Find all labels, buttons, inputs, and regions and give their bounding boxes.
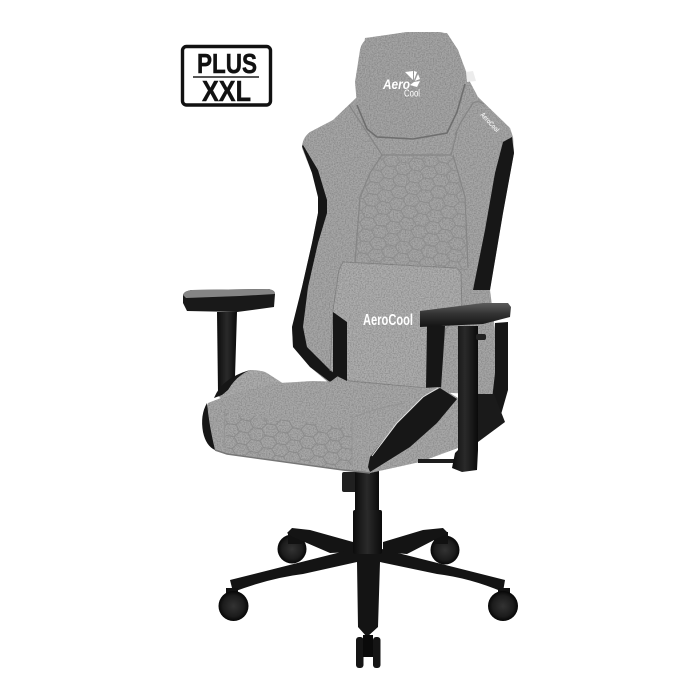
lower link bar (418, 459, 456, 463)
chair base and casters (218, 470, 518, 668)
seat cushion (202, 370, 458, 473)
headrest AeroCool logo (382, 71, 420, 100)
logo fan (405, 71, 420, 87)
armrest post (452, 326, 478, 472)
rear bracket (492, 322, 508, 418)
seat upholstery (204, 381, 458, 473)
headrest (355, 32, 465, 139)
armrest pad (183, 289, 275, 312)
lumbar pillow (330, 262, 462, 389)
right armrest assembly (418, 303, 511, 472)
badge: PLUS XXL: XXL (202, 76, 251, 108)
adjuster knob (476, 334, 486, 340)
chair backrest (292, 32, 514, 395)
headrest AeroCool logo: Aero (382, 77, 410, 92)
right black side panel (473, 137, 514, 290)
headrest AeroCool logo: Cool (404, 88, 420, 100)
seat honeycomb panel (225, 413, 352, 468)
seat left black edge (202, 403, 215, 450)
left armrest (183, 289, 275, 392)
badge: PLUS XXL (182, 46, 270, 108)
badge: PLUS XXL: PLUS (197, 48, 257, 79)
rear left caster (278, 532, 306, 564)
armrest pad (420, 303, 511, 327)
pillow right strap (426, 326, 445, 389)
rear right caster (430, 532, 460, 564)
front centre caster (356, 635, 380, 668)
rear left bolster (218, 370, 284, 402)
pillow AeroCool text: AeroCool (363, 312, 413, 329)
seat seam (224, 403, 405, 465)
gas lift column (342, 470, 382, 554)
seat right black band (368, 388, 457, 472)
armrest post (217, 312, 237, 392)
pillow left strap (333, 312, 347, 381)
back seams (349, 102, 484, 268)
rear left black trim (214, 370, 250, 398)
side AeroCool text: AeroCool (479, 112, 500, 134)
seat white piping (372, 388, 438, 456)
front right caster (488, 588, 518, 621)
honeycomb back panel (354, 156, 468, 270)
back upholstery (292, 32, 514, 395)
tilt bracket wedge (477, 394, 505, 442)
front left caster (218, 588, 248, 621)
seat front shadow (215, 450, 370, 473)
left black side panel (292, 145, 338, 382)
white side tag (466, 71, 476, 82)
star base legs (230, 528, 505, 637)
